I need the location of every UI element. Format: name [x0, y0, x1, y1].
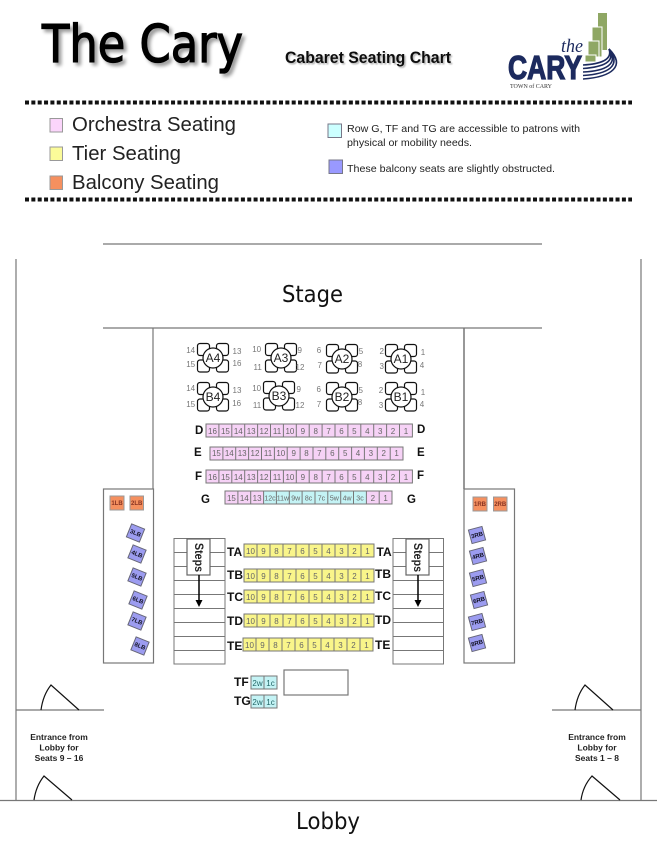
- row G: 2: [371, 494, 376, 503]
- tier row TD: 5: [313, 617, 318, 626]
- tier row TA: 4: [326, 547, 331, 556]
- row D: 14: [234, 427, 243, 436]
- right steps: Steps: [411, 543, 425, 572]
- row G: 7c: [318, 496, 326, 502]
- row F: 8: [313, 473, 318, 482]
- left balcony seats: 6LB: [131, 596, 145, 606]
- tier row TC: 2: [352, 593, 357, 602]
- row D: 4: [365, 427, 370, 436]
- entrance note: seats 9-16: Lobby for: [39, 742, 79, 752]
- tier row TD: 8: [274, 617, 279, 626]
- tier row TE: 9: [260, 641, 265, 650]
- legend: accessibility note: Row G, TF and TG are accessible to patrons with: [347, 123, 580, 135]
- tables row B: 3: [379, 401, 384, 410]
- tables row A: 12: [296, 363, 305, 372]
- row TF: 1c: [266, 679, 275, 688]
- tier row TA: 9: [261, 547, 266, 556]
- row D: 9: [301, 427, 306, 436]
- tables row B: 7: [317, 400, 322, 409]
- right steps: [393, 538, 444, 664]
- row G: 8c: [305, 496, 313, 502]
- row D: 16: [208, 427, 217, 436]
- row D: D: [417, 424, 425, 436]
- tier row TA: TA: [227, 545, 242, 559]
- tier row TD: 3: [339, 617, 344, 626]
- row F: 4: [365, 473, 370, 482]
- row E: 12: [251, 449, 260, 458]
- row F: 10: [285, 473, 295, 482]
- tier row TC: 9: [261, 593, 266, 602]
- tier row TC: TC: [375, 589, 391, 603]
- tables row B: 13: [233, 386, 242, 395]
- row E: E: [417, 447, 425, 459]
- row TG: 1c: [266, 698, 275, 707]
- tables row B: B3: [272, 389, 287, 403]
- legend: seating types: Balcony Seating: [72, 172, 219, 194]
- tier row TB: 4: [326, 572, 331, 581]
- subtitle: Cabaret Seating Chart: [285, 48, 451, 67]
- right balcony seats: 8RB: [471, 639, 484, 648]
- row E: 14: [225, 449, 234, 458]
- row D: 12: [260, 427, 269, 436]
- row G: 9w: [291, 496, 301, 502]
- row F: 14: [234, 473, 243, 482]
- row F: 15: [221, 473, 230, 482]
- tables row A: 11: [254, 363, 262, 372]
- row G: 5w: [330, 496, 340, 502]
- row D: 10: [285, 427, 295, 436]
- tier row TE: [227, 638, 390, 653]
- tier row TB: 6: [300, 572, 305, 581]
- row F: 13: [247, 473, 256, 482]
- tables row A: A4: [206, 351, 221, 365]
- tier row TC: 4: [326, 593, 331, 602]
- legend: accessibility note: [328, 123, 580, 149]
- legend: accessibility note: physical or mobility needs.: [347, 137, 472, 149]
- row G: [201, 491, 416, 506]
- entrance note: seats 9-16: Seats 9 – 16: [35, 753, 84, 763]
- row E: 6: [330, 449, 335, 458]
- tables row A: 1: [421, 348, 426, 357]
- row E: [194, 447, 425, 460]
- entrance note: seats 9-16: Entrance from: [30, 732, 88, 742]
- row G: G: [201, 494, 210, 506]
- tables row A: 10: [252, 345, 262, 354]
- tables row A: [186, 344, 426, 373]
- row D: D: [195, 425, 203, 437]
- tier row TE: TE: [375, 638, 390, 652]
- tables row B: 8: [358, 398, 363, 407]
- logo: the Cary: TOWN of CARY: [510, 83, 553, 90]
- row TG: 2w: [252, 698, 263, 707]
- tables row A: 15: [186, 360, 196, 369]
- tables row B: 5: [358, 386, 363, 395]
- row E: 2: [381, 449, 386, 458]
- row F: F: [195, 471, 202, 483]
- tier row TA: 8: [274, 547, 279, 556]
- row E: 4: [356, 449, 361, 458]
- tables row A: A1: [394, 352, 409, 366]
- legend: seating types: [50, 114, 236, 194]
- tier row TB: 5: [313, 572, 318, 581]
- tier row TD: 2: [352, 617, 357, 626]
- tier row TC: 5: [313, 593, 318, 602]
- tier row TB: 9: [261, 572, 266, 581]
- logo: the Cary: CARY: [508, 49, 582, 86]
- tier row TC: [227, 589, 391, 604]
- row D: 5: [352, 427, 357, 436]
- entrance note: seats 9-16: [30, 732, 88, 763]
- row D: 8: [313, 427, 318, 436]
- left steps: [174, 538, 225, 664]
- row F: 9: [301, 473, 306, 482]
- row G: 13: [253, 494, 262, 503]
- row E: 13: [238, 449, 247, 458]
- tables row B: 11: [253, 401, 262, 410]
- left balcony seats: 8LB: [133, 642, 147, 652]
- row F: 16: [208, 473, 217, 482]
- tables row A: 16: [233, 359, 242, 368]
- row E: 7: [317, 449, 322, 458]
- tier row TB: 8: [274, 572, 279, 581]
- tier row TC: 7: [287, 593, 292, 602]
- tables row A: 9: [297, 346, 302, 355]
- row E: 9: [291, 449, 296, 458]
- legend: seating types: Tier Seating: [72, 143, 181, 165]
- tables row B: B1: [394, 390, 409, 404]
- row TG: [234, 694, 277, 708]
- row TF: TF: [234, 675, 249, 689]
- sound booth box: [284, 670, 348, 695]
- tier row TB: 2: [352, 572, 357, 581]
- row G: 3c: [356, 496, 364, 502]
- tier row TC: 1: [365, 593, 370, 602]
- tables row A: 6: [317, 346, 322, 355]
- tables row A: A3: [274, 351, 289, 365]
- lobby label: Lobby: [296, 809, 360, 835]
- tables row B: 9: [296, 385, 301, 394]
- row E: E: [194, 447, 202, 459]
- row F: 7: [326, 473, 331, 482]
- tier row TC: 3: [339, 593, 344, 602]
- row G: 4w: [343, 496, 353, 502]
- tables row B: 14: [186, 384, 196, 393]
- tier row TD: TD: [227, 614, 243, 628]
- row D: 6: [339, 427, 344, 436]
- row TF: 2w: [252, 679, 263, 688]
- tier row TB: 3: [339, 572, 344, 581]
- tables row A: 5: [359, 347, 364, 356]
- row D: 7: [326, 427, 331, 436]
- row E: 1: [394, 449, 399, 458]
- tier row TA: 6: [300, 547, 305, 556]
- tier row TC: 8: [274, 593, 279, 602]
- right balcony seats: 2RB: [494, 502, 507, 508]
- right balcony seats: 3RB: [471, 531, 484, 540]
- row D: [195, 424, 425, 437]
- left balcony seats: 5LB: [130, 573, 144, 583]
- row G: 1: [383, 494, 388, 503]
- tier row TC: 6: [300, 593, 305, 602]
- tier row TE: 5: [312, 641, 317, 650]
- tier row TB: 7: [287, 572, 292, 581]
- left balcony seats: 3LB: [129, 529, 142, 539]
- logo: the Cary: the: [561, 36, 583, 57]
- tier row TE: 10: [245, 641, 254, 650]
- tables row B: B4: [206, 390, 221, 404]
- tables row B: 16: [232, 399, 242, 408]
- legend: seating types: Orchestra Seating: [72, 114, 236, 136]
- tables row A: 2: [379, 347, 384, 356]
- left balcony seats: 1LB: [111, 501, 123, 507]
- row F: [195, 470, 424, 483]
- row E: 3: [369, 449, 374, 458]
- row F: 6: [339, 473, 344, 482]
- tables row B: 4: [420, 400, 425, 409]
- row E: 5: [343, 449, 348, 458]
- row F: 1: [404, 473, 409, 482]
- row F: 12: [260, 473, 269, 482]
- tier row TB: 1: [365, 572, 370, 581]
- tier row TE: 7: [286, 641, 291, 650]
- tier row TB: TB: [375, 567, 391, 581]
- entrance note: seats 1-8: [568, 732, 626, 763]
- tier row TE: 1: [364, 641, 369, 650]
- title: The Cary: [41, 15, 243, 75]
- row G: 15: [227, 494, 236, 503]
- tables row A: A2: [335, 352, 350, 366]
- row F: 2: [391, 473, 396, 482]
- row G: 12c: [264, 496, 276, 502]
- tables row B: 12: [296, 401, 305, 410]
- row F: 11: [273, 473, 282, 482]
- row D: 15: [221, 427, 230, 436]
- tier row TD: 1: [365, 617, 370, 626]
- tier row TD: 10: [246, 617, 255, 626]
- tables row A: 7: [317, 361, 322, 370]
- right balcony seats: 4RB: [472, 552, 485, 561]
- tables row B: 15: [186, 400, 196, 409]
- tier row TC: 10: [246, 593, 255, 602]
- row E: 11: [264, 449, 273, 458]
- tables row A: 3: [379, 362, 384, 371]
- row D: 1: [404, 427, 409, 436]
- tier row TD: TD: [375, 613, 391, 627]
- tables row A: 13: [233, 347, 242, 356]
- tier row TA: 2: [352, 547, 357, 556]
- entrance note: seats 1-8: Seats 1 – 8: [575, 753, 619, 763]
- tier row TA: 1: [365, 547, 370, 556]
- stage label: Stage: [282, 282, 343, 308]
- row G: G: [407, 494, 416, 506]
- tier row TA: 7: [287, 547, 292, 556]
- tables row A: 4: [420, 361, 425, 370]
- tier row TB: [227, 567, 391, 582]
- left balcony seats: 2LB: [131, 501, 143, 507]
- tables row A: 8: [358, 360, 363, 369]
- tier row TA: TA: [376, 545, 392, 559]
- right balcony seats: 7RB: [471, 618, 484, 627]
- row D: 13: [247, 427, 256, 436]
- right balcony seats: [468, 497, 507, 652]
- entrance note: seats 1-8: Entrance from: [568, 732, 626, 742]
- row E: 8: [304, 449, 309, 458]
- tier row TC: TC: [227, 590, 243, 604]
- row G: 14: [240, 494, 249, 503]
- right balcony seats: 1RB: [474, 502, 487, 508]
- walls: [0, 244, 657, 800]
- tier row TE: 8: [273, 641, 278, 650]
- row F: F: [417, 470, 424, 482]
- row TF: [234, 675, 277, 689]
- row E: 15: [212, 449, 221, 458]
- tables row B: B2: [335, 390, 350, 404]
- right balcony seats: 5RB: [472, 574, 485, 583]
- row G: 11w: [277, 496, 290, 502]
- tables row B: 1: [421, 388, 426, 397]
- row D: 11: [273, 427, 282, 436]
- left balcony seats: 4LB: [130, 550, 144, 560]
- tables row B: 6: [316, 385, 321, 394]
- left balcony seats: 7LB: [130, 617, 144, 627]
- tier row TB: TB: [227, 568, 243, 582]
- tables row B: [186, 382, 426, 411]
- tier row TE: 4: [325, 641, 330, 650]
- entrance note: seats 1-8: Lobby for: [577, 742, 617, 752]
- doors: [34, 685, 620, 800]
- tables row B: 10: [252, 384, 262, 393]
- tier row TA: 3: [339, 547, 344, 556]
- tier row TA: [227, 544, 392, 559]
- left steps: Steps: [192, 543, 206, 572]
- row TG: TG: [234, 694, 251, 708]
- row E: 10: [276, 449, 286, 458]
- tier row TD: [227, 613, 391, 628]
- legend: obstructed note: These balcony seats are slightly obstructed.: [347, 163, 555, 175]
- row D: 3: [378, 427, 383, 436]
- tier row TE: 6: [299, 641, 304, 650]
- left balcony seats: [110, 496, 149, 655]
- tier row TD: 7: [287, 617, 292, 626]
- tier row TD: 6: [300, 617, 305, 626]
- row F: 5: [352, 473, 357, 482]
- tier row TE: TE: [227, 639, 242, 653]
- tables row B: 2: [379, 386, 384, 395]
- tier row TA: 5: [313, 547, 318, 556]
- row D: 2: [391, 427, 396, 436]
- tier row TD: 4: [326, 617, 331, 626]
- row F: 3: [378, 473, 383, 482]
- tier row TE: 3: [338, 641, 343, 650]
- logo: the Cary: [508, 13, 616, 90]
- tier row TE: 2: [351, 641, 356, 650]
- tables row A: 14: [186, 346, 196, 355]
- tier row TD: 9: [261, 617, 266, 626]
- tier row TA: 10: [246, 547, 255, 556]
- right balcony seats: 6RB: [473, 596, 486, 605]
- tier row TB: 10: [246, 572, 255, 581]
